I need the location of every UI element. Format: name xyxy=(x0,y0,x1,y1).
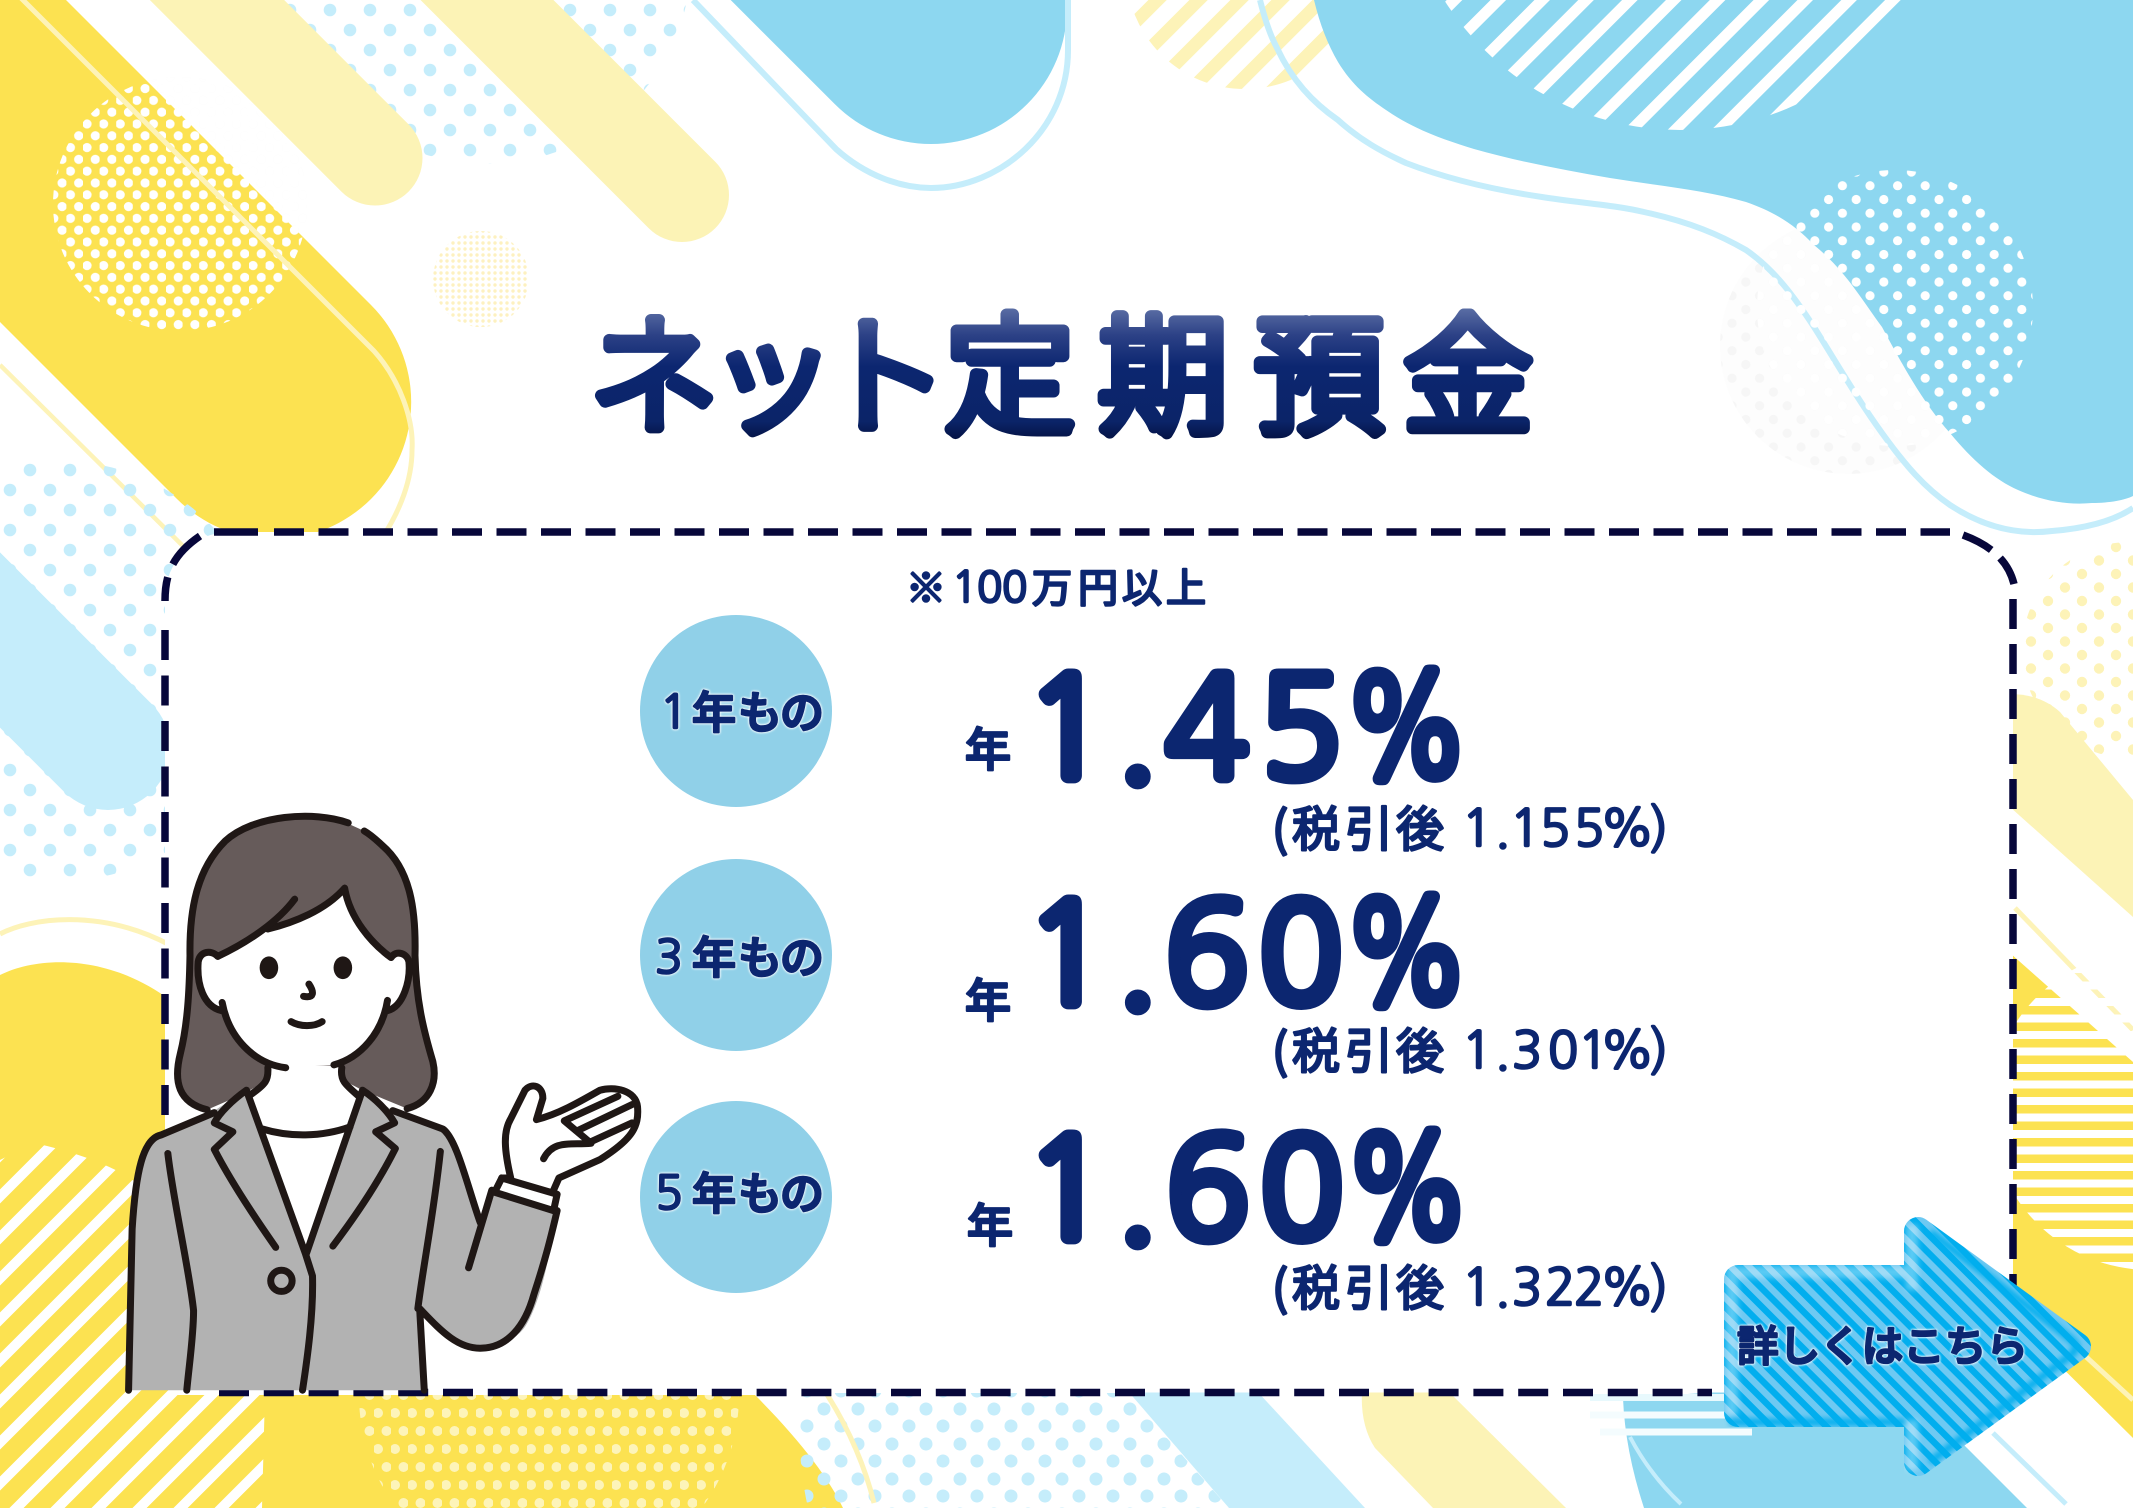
thin arc on blue xyxy=(1630,1437,1681,1504)
dot circle: white on yellow xyxy=(53,77,307,331)
faint dot circle right xyxy=(1720,218,1976,474)
big yellow pill xyxy=(0,0,411,539)
pale yellow pill two xyxy=(420,0,682,195)
neck lines xyxy=(250,1068,359,1135)
note: minimum deposit: 万円以上 xyxy=(1032,556,1206,614)
dot circle: pale yellow right xyxy=(2022,542,2133,758)
circle: 3 years: 年もの xyxy=(692,922,824,986)
pale yellow pill one xyxy=(150,0,375,158)
arrow highlight xyxy=(1732,1225,1912,1470)
blue blob top right xyxy=(1314,0,2133,504)
pale yellow pill right xyxy=(2010,694,2133,917)
jacket xyxy=(129,1090,557,1390)
circle: 5 years xyxy=(640,1101,832,1293)
row: 3 years xyxy=(640,859,1668,1082)
title: ネット定期預金 xyxy=(589,273,1533,461)
circle: 1 year: 年もの xyxy=(692,677,824,741)
blue shape bottom right xyxy=(1623,1381,2027,1508)
pale band at panel edge xyxy=(1590,1394,1730,1401)
jacket outline xyxy=(129,1111,557,1390)
panel: rates card xyxy=(165,532,2014,1392)
neck and shirt xyxy=(246,1066,362,1249)
small pale dot circle xyxy=(433,231,529,327)
circle: 3 years xyxy=(640,859,832,1051)
dot circle: blue left xyxy=(0,461,270,881)
rate: 1.60 xyxy=(1025,1120,1344,1258)
after tax rate: (税引後 xyxy=(1272,1012,1444,1082)
circle: 3 years: 3 xyxy=(655,934,683,980)
dot circle: blue bottom xyxy=(800,1393,1229,1508)
hand xyxy=(502,1086,638,1194)
button xyxy=(271,1270,292,1291)
arrow shading xyxy=(1730,1225,2076,1470)
thin pale line in yellow xyxy=(2070,1342,2133,1400)
note: minimum deposit: ※ xyxy=(906,556,946,614)
row: 5 years xyxy=(640,1101,1668,1319)
after tax rate: 1.301%) xyxy=(1462,1026,1668,1076)
thin yellow diagonal right xyxy=(2015,908,2133,1030)
rate: % xyxy=(1345,1120,1470,1258)
row: 1 year xyxy=(640,615,1668,860)
note: minimum deposit: 100 xyxy=(952,567,1027,609)
striped circle: white on blue xyxy=(1401,0,1959,130)
panel fill xyxy=(165,532,2013,1392)
eyes xyxy=(260,956,352,979)
light blue pill left xyxy=(0,540,108,748)
rate: % xyxy=(1344,659,1469,797)
arrow label: 詳しくはこちら xyxy=(1737,1313,2028,1374)
label: per year: 年 xyxy=(967,1190,1013,1256)
dot circle: white on blue blob xyxy=(1757,170,2033,446)
blue pill top xyxy=(781,0,931,8)
rate: 1.45 xyxy=(1025,659,1343,797)
rate: % xyxy=(1344,885,1469,1023)
thin yellow arc bottom xyxy=(826,1393,874,1503)
thin yellow arc left xyxy=(0,920,170,945)
after tax rate: 1.155%) xyxy=(1462,804,1668,854)
after tax rate: 1.322%) xyxy=(1462,1263,1668,1313)
illustration: businesswoman xyxy=(129,816,638,1390)
hair xyxy=(178,816,434,1110)
dot circle: pale on yellow xyxy=(359,1395,739,1508)
arrow edge xyxy=(1730,1232,2076,1462)
face fill xyxy=(198,888,409,1068)
thin yellow outline xyxy=(20,0,412,535)
after tax rate: (税引後 xyxy=(1272,790,1444,860)
white streaks on blue xyxy=(1590,1415,1752,1432)
arrow shape xyxy=(1738,1231,2077,1462)
yellow shape right xyxy=(2010,953,2133,1438)
fringe line xyxy=(218,899,295,956)
dot circle: blue top left xyxy=(283,0,691,164)
dashed border xyxy=(165,532,2014,1392)
dot circle: faint over white xyxy=(53,77,307,331)
label: per year: 年 xyxy=(965,714,1011,780)
fingers xyxy=(544,1096,632,1159)
hair outline xyxy=(178,816,434,1110)
circle: 1 year xyxy=(640,615,832,807)
circle: 1 year: 1 xyxy=(660,689,688,735)
lapels xyxy=(214,1090,395,1390)
face outline xyxy=(198,888,409,1068)
nose and mouth xyxy=(291,984,322,1026)
arrow button xyxy=(1730,1225,2077,1470)
after tax rate: (税引後 xyxy=(1272,1249,1444,1319)
pale yellow pill bottom xyxy=(1362,1390,1566,1508)
cuff xyxy=(495,1178,557,1211)
circle: 5 years: 年もの xyxy=(692,1158,824,1222)
light blue stripe bottom xyxy=(1127,1390,1365,1508)
circle: 5 years: 5 xyxy=(655,1170,683,1216)
label: per year: 年 xyxy=(965,965,1011,1031)
thin blue outline xyxy=(693,0,1068,188)
rate: 1.60 xyxy=(1025,885,1343,1023)
thin wave line xyxy=(1260,0,2133,532)
horizontal stripe circle xyxy=(1990,950,2133,1270)
striped circle: pale yellow xyxy=(1126,0,1364,89)
thin blue diagonal xyxy=(1993,1433,2066,1504)
yellow blob bottom left xyxy=(0,962,843,1508)
thin yellow diagonal xyxy=(0,365,185,548)
striped circle: white on yellow xyxy=(0,1130,270,1508)
